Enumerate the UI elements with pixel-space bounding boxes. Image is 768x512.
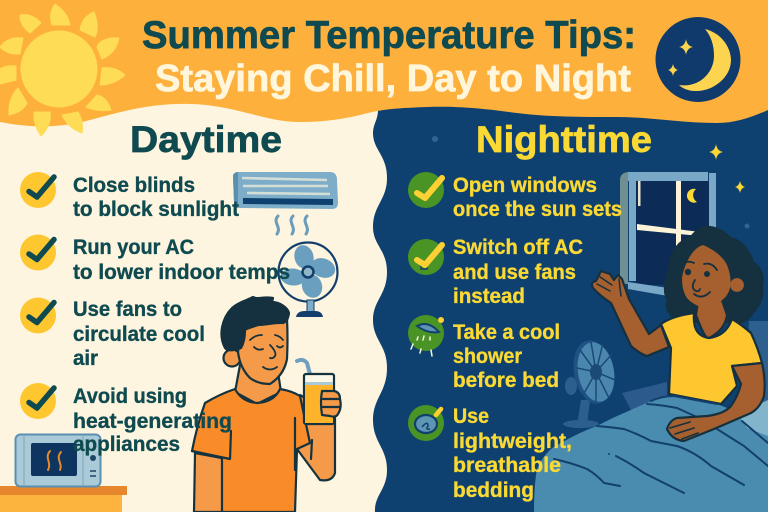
list: daytime tips: Run your AC: [73, 236, 194, 259]
heading: daytime: Daytime: [130, 119, 282, 160]
illustration: man drinking juice: [192, 297, 341, 512]
woman: raised arm and hand: [592, 271, 669, 356]
illustration: air conditioner: [233, 172, 338, 209]
title: Summer Temperature Tips:: [142, 14, 636, 57]
night sky stars: [432, 136, 750, 228]
list: nighttime tips: Take a cool: [453, 321, 560, 344]
illustration: headboard and pillow: [622, 321, 768, 430]
man: face: [238, 318, 288, 384]
list: daytime tips: to block sunlight: [73, 198, 239, 221]
man: straw: [297, 360, 313, 385]
woman: ear: [729, 277, 745, 293]
list: nighttime tips: bedding: [453, 479, 534, 502]
list: daytime tips: air: [73, 347, 98, 370]
man: arm near side: [194, 453, 223, 512]
man: raised arm: [297, 395, 335, 480]
man: ear: [224, 350, 240, 366]
panel: nighttime background: [373, 90, 768, 512]
list: nighttime tips: Switch off AC: [453, 236, 583, 259]
list: nighttime tips: and use fans: [453, 261, 576, 284]
man: glass of juice: [304, 374, 334, 424]
illustration: desk fan: [278, 242, 338, 317]
list: daytime tips: heat-generating: [73, 410, 232, 433]
illustration: woman's arm resting on blanket: [667, 363, 765, 441]
list: daytime tips: [73, 174, 290, 456]
list: nighttime tips: shower: [453, 345, 522, 368]
man: t-shirt: [192, 389, 310, 512]
woman: neck: [696, 300, 727, 338]
illustration: blanket: [534, 396, 768, 512]
illustration: bedroom window: [620, 172, 716, 296]
icon: cool shower: [408, 315, 444, 356]
man: neck: [235, 365, 281, 404]
list: daytime tips: appliances: [73, 433, 180, 456]
list: daytime tips: to lower indoor temps: [73, 261, 290, 284]
woman: eyes, brows and smile: [682, 262, 717, 297]
list: daytime tips: circulate cool: [73, 323, 205, 346]
woman: finger lines: [597, 277, 621, 296]
heading: nighttime: Nighttime: [476, 119, 652, 160]
man: closed eyes and smile: [250, 335, 283, 370]
list: nighttime tips: Use: [453, 405, 489, 428]
icon: bedding: [408, 405, 444, 441]
list: nighttime tips: instead: [453, 285, 525, 308]
list: nighttime tips: before bed: [453, 369, 559, 392]
woman: t-shirt: [661, 313, 762, 404]
man: hand: [321, 391, 341, 417]
woman: face: [682, 245, 731, 308]
illustration: night fan: [563, 337, 619, 428]
list: daytime tips: Use fans to: [73, 298, 182, 321]
list: daytime tips: Close blinds: [73, 174, 195, 197]
list: nighttime tips: breathable: [453, 454, 561, 477]
icon: night checks: [408, 172, 444, 275]
icon: daytime checks: [20, 172, 56, 419]
list: nighttime tips: lightweight,: [453, 430, 572, 453]
panel: header banner: [0, 0, 768, 126]
illustration: microwave on counter: [0, 434, 127, 512]
list: nighttime tips: once the sun sets: [453, 198, 622, 221]
icon: sun: [0, 4, 125, 136]
man: hair: [221, 297, 289, 350]
list: nighttime tips: [453, 174, 622, 502]
list: nighttime tips: Open windows: [453, 174, 597, 197]
icon: moon badge: [656, 17, 740, 102]
man: sleeve edge: [192, 418, 312, 470]
list: daytime tips: Avoid using: [73, 385, 187, 408]
title: [142, 14, 636, 100]
title: Staying Chill, Day to Night: [155, 58, 631, 100]
icon: cool air wiggles: [276, 216, 307, 234]
woman: hair: [665, 227, 763, 323]
illustration: woman waving: [592, 227, 763, 404]
